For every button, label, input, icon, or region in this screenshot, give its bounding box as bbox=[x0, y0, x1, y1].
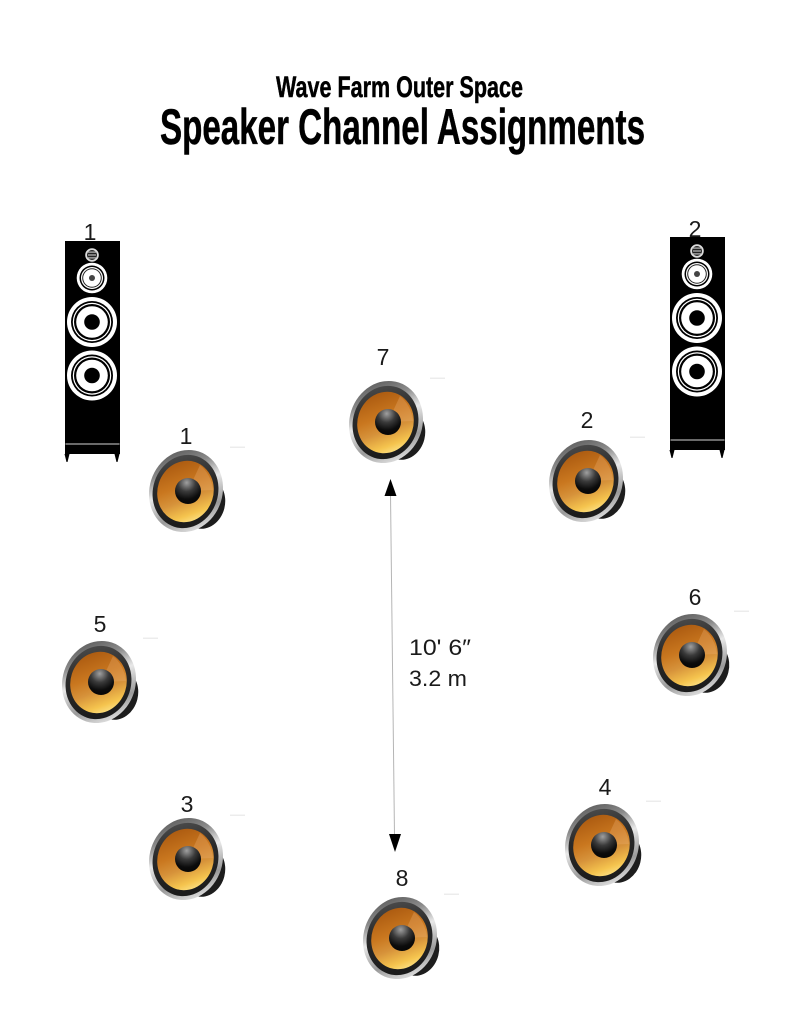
tower speaker 2 bbox=[670, 216, 725, 458]
speaker 1 bbox=[138, 423, 245, 542]
speaker 8: 8 bbox=[396, 865, 408, 891]
speaker 5: 5 bbox=[94, 611, 106, 637]
speaker 2: 2 bbox=[581, 407, 593, 433]
speaker 4 bbox=[554, 774, 661, 896]
speaker 3: 3 bbox=[181, 791, 193, 817]
speaker 3 bbox=[138, 791, 245, 910]
speaker 6 bbox=[642, 584, 749, 706]
speaker 1: 1 bbox=[180, 423, 192, 449]
speaker 2 bbox=[538, 407, 645, 532]
arrow: distance between speakers 7 and 8 bbox=[384, 479, 401, 852]
speaker 7: 7 bbox=[377, 344, 389, 370]
tower speaker 2: 2 bbox=[689, 216, 701, 242]
distance label: 10' 6″ bbox=[409, 635, 471, 660]
heading: Wave Farm Outer Space: Wave Farm Outer Space bbox=[276, 71, 523, 104]
tower speaker 1: 1 bbox=[84, 219, 96, 245]
speaker 8 bbox=[352, 865, 459, 989]
tower speaker 1 bbox=[64, 219, 120, 462]
title bbox=[160, 71, 645, 155]
distance label: 3.2 m bbox=[409, 666, 467, 691]
distance label bbox=[409, 635, 471, 691]
speaker 5 bbox=[51, 611, 158, 733]
speaker 7 bbox=[338, 344, 445, 473]
speaker 4: 4 bbox=[599, 774, 612, 800]
speaker 6: 6 bbox=[689, 584, 701, 610]
